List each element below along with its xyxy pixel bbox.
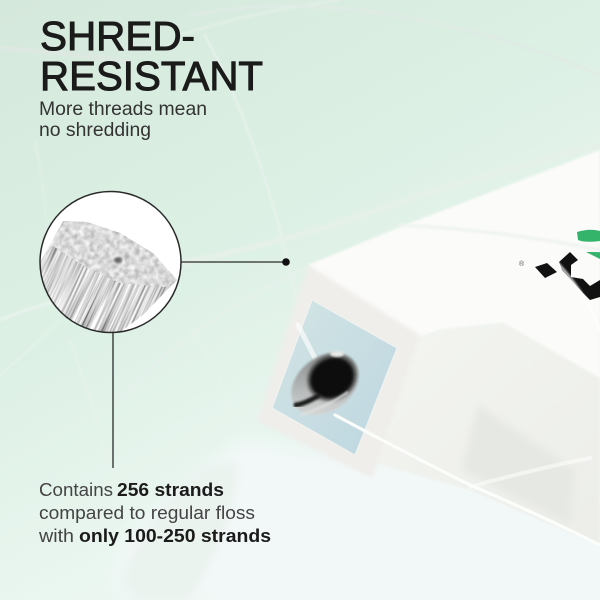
floss container: top face [308, 150, 600, 380]
caption: only 100-250 strands [79, 526, 271, 546]
caption [38, 480, 271, 546]
floss container: side wall [358, 323, 600, 545]
logo on container: ® [519, 260, 525, 268]
title [40, 13, 263, 99]
subtitle: More threads mean [39, 98, 207, 120]
logo on container [519, 230, 600, 300]
magnified strands circle [39, 190, 182, 334]
subtitle [39, 98, 207, 141]
title: RESISTANT [40, 53, 263, 99]
leader line to container [181, 258, 290, 266]
subtitle: no shredding [39, 119, 151, 141]
floss strand through eyelet [298, 325, 600, 545]
caption: compared to regular floss [39, 503, 255, 523]
caption: with [38, 526, 74, 546]
leader line to caption [112, 333, 114, 468]
lid floss threads [400, 225, 600, 330]
floss container: lower case body [119, 440, 600, 600]
background floss threads [0, 0, 600, 470]
metal eyelet window [272, 300, 397, 455]
floss container: front frame [257, 265, 420, 478]
floss container: recessed inner panel [462, 405, 575, 525]
metal nozzle [279, 340, 371, 428]
caption: 256 strands [117, 480, 224, 500]
title: SHRED- [40, 13, 195, 59]
caption: Contains [39, 480, 113, 500]
